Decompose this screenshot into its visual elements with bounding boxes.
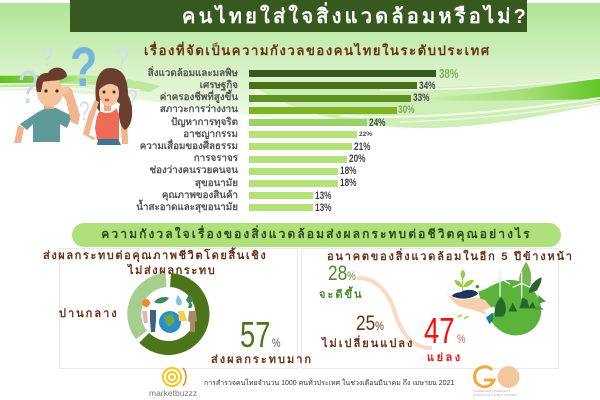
panel: quality of life [43, 247, 313, 366]
row labels: คุณภาพของสินค้า [162, 190, 238, 201]
logo: GO Thammasat [473, 365, 520, 397]
logo: marketbuzzz [149, 367, 197, 398]
impact heading: ไม่ส่งผลกระทบ [128, 265, 216, 277]
better label: จะดีขึ้น [319, 289, 364, 301]
connector curve [357, 276, 432, 350]
panel: future [319, 248, 574, 364]
GO caption: THAMMASAT UNIVERSITY [473, 389, 510, 393]
value labels: 33% [413, 92, 430, 104]
28 percent: 28% [328, 262, 356, 285]
value labels: 13% [315, 202, 332, 214]
value labels: 13% [315, 190, 332, 202]
value labels [315, 66, 459, 214]
illustration: confused couple: ? [18, 61, 38, 113]
panel frame [59, 248, 298, 369]
57 percent: 57 [240, 314, 270, 355]
illustration: confused couple: ? [79, 96, 90, 126]
value labels: 34% [419, 80, 436, 92]
illustration: confused couple [14, 40, 138, 145]
title banner [70, 0, 527, 32]
value labels: 22% [359, 131, 372, 138]
value labels: 20% [349, 153, 366, 165]
section banner: ความกังวลใจเรื่องของสิ่งแวดล้อมส่งผลกระทบต่อชีวิตคุณอย่างไร [101, 227, 532, 241]
value labels: 21% [354, 141, 371, 153]
section banner [72, 223, 561, 247]
row labels: ค่าครองชีพที่สูงขึ้น [160, 92, 238, 103]
57 percent sign: % [272, 336, 281, 350]
middle label: ปานกลาง [59, 308, 119, 320]
row labels: สุขอนามัย [195, 178, 238, 189]
row labels: ช่องว่างคนรวยคนจน [149, 165, 238, 176]
illustration: hand with nature [446, 262, 546, 336]
row labels: สภาวะการว่างงาน [160, 104, 238, 115]
25 percent: 25% [356, 312, 384, 335]
value labels: 38% [439, 66, 459, 81]
row labels: เศรษฐกิจ [200, 80, 238, 91]
high impact label: ส่งผลกระทบมาก [211, 354, 313, 366]
row labels: น้ำสะอาดและสุขอนามัย [136, 202, 238, 213]
no change label: ไม่เปลี่ยนแปลง [322, 338, 414, 350]
footnote: การสำรวจคนไทยจำนวน 1000 คนทั่วประเทศ ในช่วงเดือนมีนาคม ถึง เมษายน 2021 [204, 380, 454, 387]
donut chart [127, 273, 210, 355]
future heading: อนาคตของสิ่งแวดล้อมในอีก 5 ปีข้างหน้า [327, 251, 574, 263]
GO mark [473, 365, 520, 388]
row labels: การจราจร [194, 153, 238, 164]
bars [249, 70, 436, 211]
row labels: ความเสื่อมของศีลธรรม [140, 141, 238, 152]
logo wordmark: marketbuzzz [149, 388, 197, 398]
47 percent: 47 [424, 310, 454, 351]
impact heading: ส่งผลกระทบต่อคุณภาพชีวิตโดยสิ้นเชิง [43, 250, 267, 262]
worse label: แย่ลง [427, 352, 463, 364]
47 percent sign: % [457, 332, 466, 346]
subtitle: เรื่องที่จัดเป็นความกังวลของคนไทยในระดับประเทศ [144, 43, 491, 58]
value labels: 30% [398, 104, 415, 116]
illustration: confused couple: ? [41, 43, 53, 73]
row labels: ปัญหาการทุจริต [171, 117, 238, 128]
value labels: 18% [340, 165, 357, 177]
logo mark [162, 367, 187, 387]
row labels: อาชญากรรม [183, 129, 238, 140]
illustration: confused couple: ? [115, 42, 129, 78]
value labels: 18% [340, 177, 357, 189]
row labels [136, 66, 238, 213]
value labels: 24% [369, 117, 386, 129]
GO caption: SCHOOL OF GLOBAL STUDIES [473, 393, 517, 397]
impact heading [43, 247, 267, 277]
GO caption [473, 389, 517, 397]
illustration: confused couple: ? [127, 84, 138, 114]
bar chart [136, 66, 459, 214]
title text: คนไทยใส่ใจสิ่งแวดล้อมหรือไม่? [182, 6, 527, 28]
row labels: สิ่งแวดล้อมและมลพิษ [148, 68, 238, 79]
